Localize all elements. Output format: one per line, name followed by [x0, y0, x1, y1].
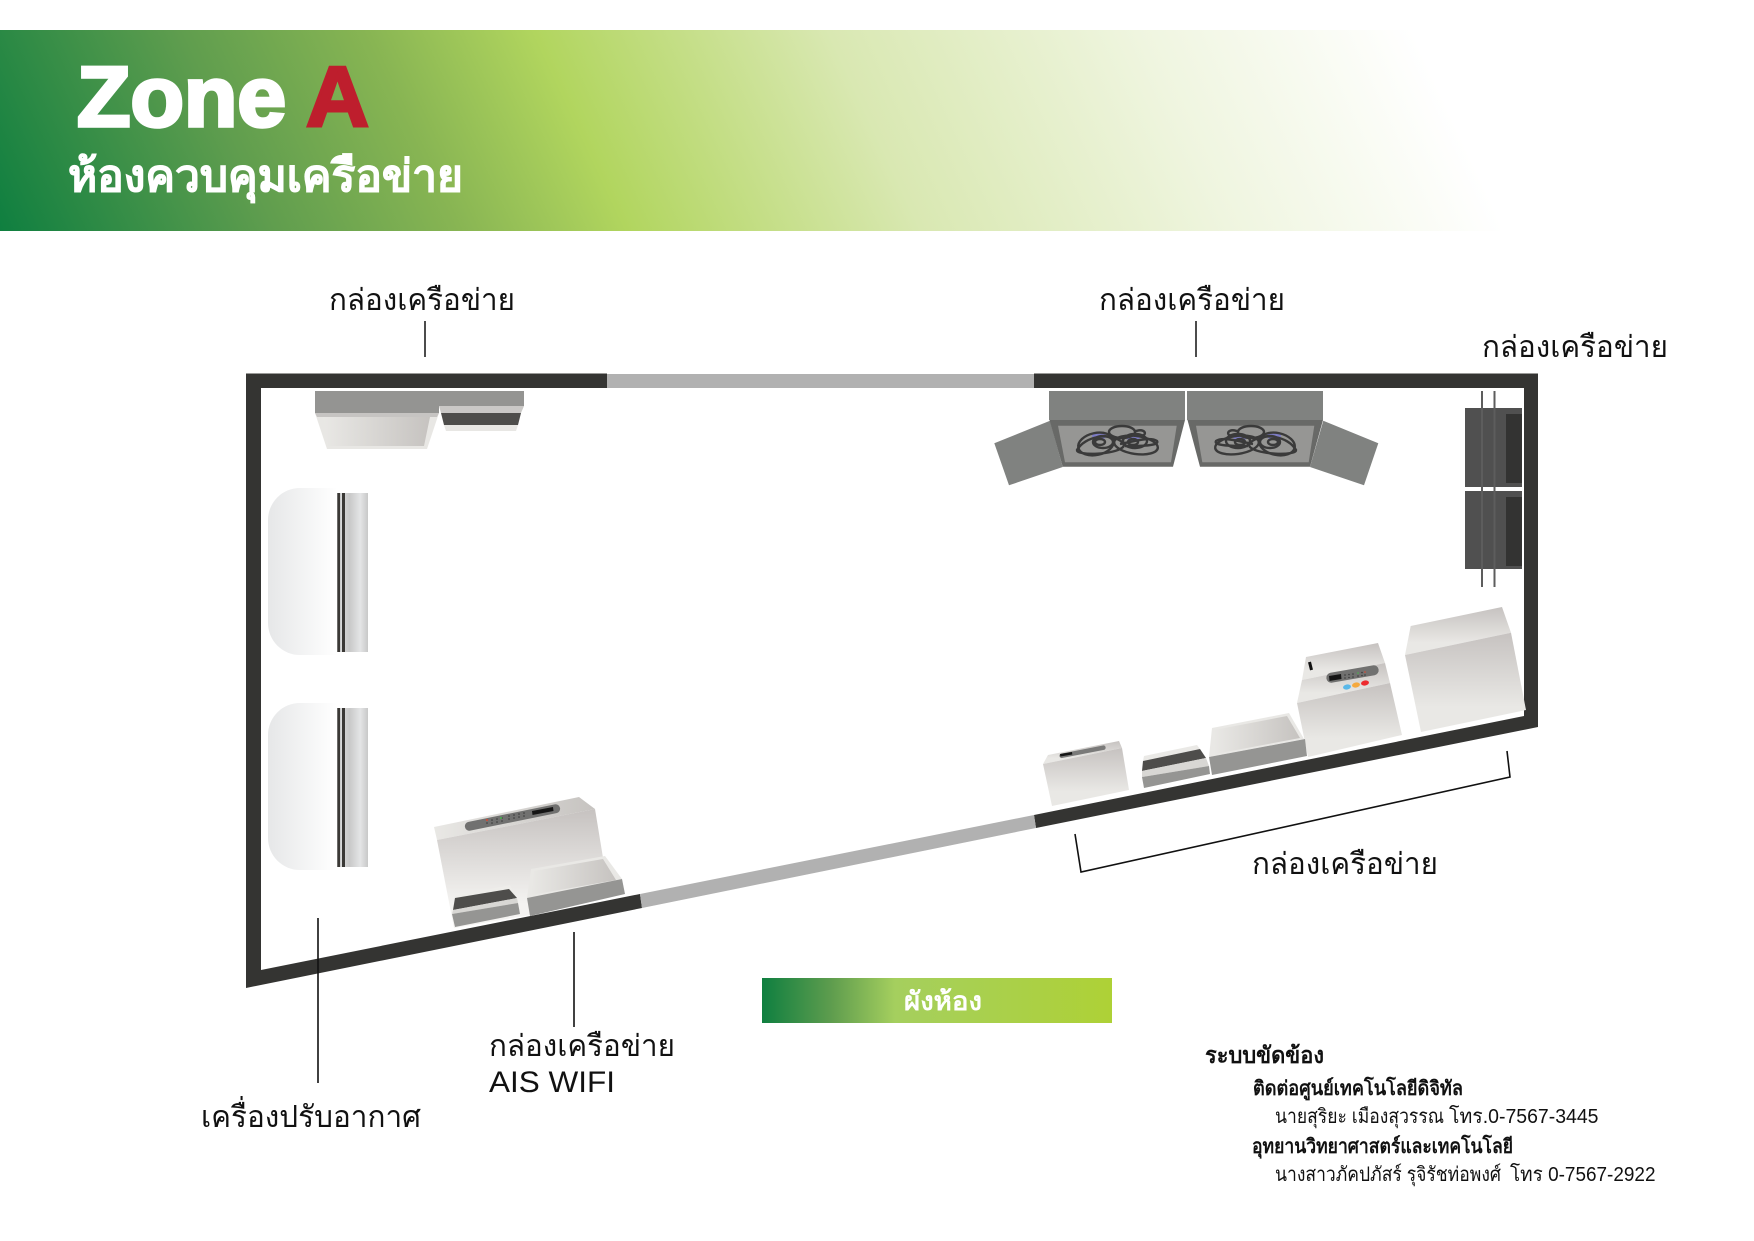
label network box right wall: กล่องเครือข่าย: [1482, 331, 1668, 364]
subtitle: ห้องควบคุมเครือข่าย: [68, 152, 463, 204]
network cabinet top right, right door: [1187, 391, 1378, 485]
AIS WIFI thin unit: [452, 885, 520, 927]
contact 2 person: นางสาวภัคปภัสร์ รุจิรัชท่อพงศ์: [1275, 1163, 1501, 1187]
tall network unit with panel: [1297, 643, 1402, 757]
small box bottom right: [1043, 741, 1129, 806]
indicator dots: [486, 812, 525, 824]
contact 1 person: นายสุริยะ เมืองสุวรรณ: [1275, 1106, 1444, 1129]
AIS WIFI router, large body: [434, 797, 605, 928]
contact 1 person: โทร.0-7567-3445: [1449, 1105, 1598, 1128]
label AIS WIFI: [489, 1030, 675, 1099]
floor plan tag: ผังห้อง: [904, 986, 982, 1016]
leader line network box top right: [1195, 321, 1197, 357]
floor plan tag: [762, 978, 1112, 1023]
tray unit bottom right: [1209, 713, 1307, 775]
title: Zone A: A: [306, 50, 369, 145]
air conditioner upper: [268, 488, 368, 655]
contact heading: ระบบขัดข้อง: [1205, 1042, 1324, 1068]
AIS WIFI tray: [527, 856, 625, 916]
leader line AIS WIFI: [573, 932, 575, 1027]
label network box top right: กล่องเครือข่าย: [1099, 284, 1285, 317]
label network box top left: กล่องเครือข่าย: [329, 284, 515, 317]
contact 1 organisation: ติดต่อศูนย์เทคโนโลยีดิจิทัล: [1253, 1076, 1463, 1102]
label AIS WIFI: กล่องเครือข่าย: [489, 1030, 675, 1063]
dark wall outline: [246, 374, 642, 988]
leader line air conditioner: [317, 918, 319, 1083]
glass wall bottom: [640, 815, 1036, 908]
label air conditioner: เครื่องปรับอากาศ: [201, 1096, 421, 1134]
panel: [464, 803, 561, 832]
glass wall top: [607, 374, 1034, 388]
tangled cables left: [1076, 426, 1159, 459]
thin unit bottom right: [1142, 745, 1210, 788]
air conditioner lower: [268, 703, 368, 870]
contact 1 person: [1275, 1105, 1598, 1129]
large box bottom right: [1405, 607, 1526, 732]
slot: [1310, 662, 1312, 670]
control panel: [1326, 664, 1379, 684]
panel: [1059, 745, 1106, 758]
network box top left small: [439, 391, 524, 431]
contact 2 organisation: อุทยานวิทยาศาสตร์และเทคโนโลยี: [1252, 1134, 1513, 1159]
room walls: [246, 374, 1538, 988]
bracket bottom right: [1075, 751, 1510, 872]
network cabinet top right, left door: [994, 391, 1185, 485]
network box top left large: [315, 391, 439, 449]
wall-mounted network boxes right: [1465, 391, 1522, 587]
coloured buttons: [1343, 684, 1351, 690]
title: Zone A: Zone: [77, 50, 286, 145]
tangled cables right: [1214, 426, 1297, 459]
indicator dots: [1344, 671, 1366, 679]
label AIS WIFI: AIS WIFI: [489, 1066, 615, 1099]
leader line network box top left: [424, 321, 426, 357]
contact 2 person: โทร 0-7567-2922: [1510, 1163, 1656, 1186]
header banner: [0, 30, 1500, 231]
contact 2 person: [1275, 1163, 1656, 1187]
banner gradient background: [0, 30, 1500, 231]
contact block: [1205, 1042, 1656, 1187]
label network box bottom right: กล่องเครือข่าย: [1252, 848, 1438, 881]
title: Zone A: [77, 50, 369, 145]
